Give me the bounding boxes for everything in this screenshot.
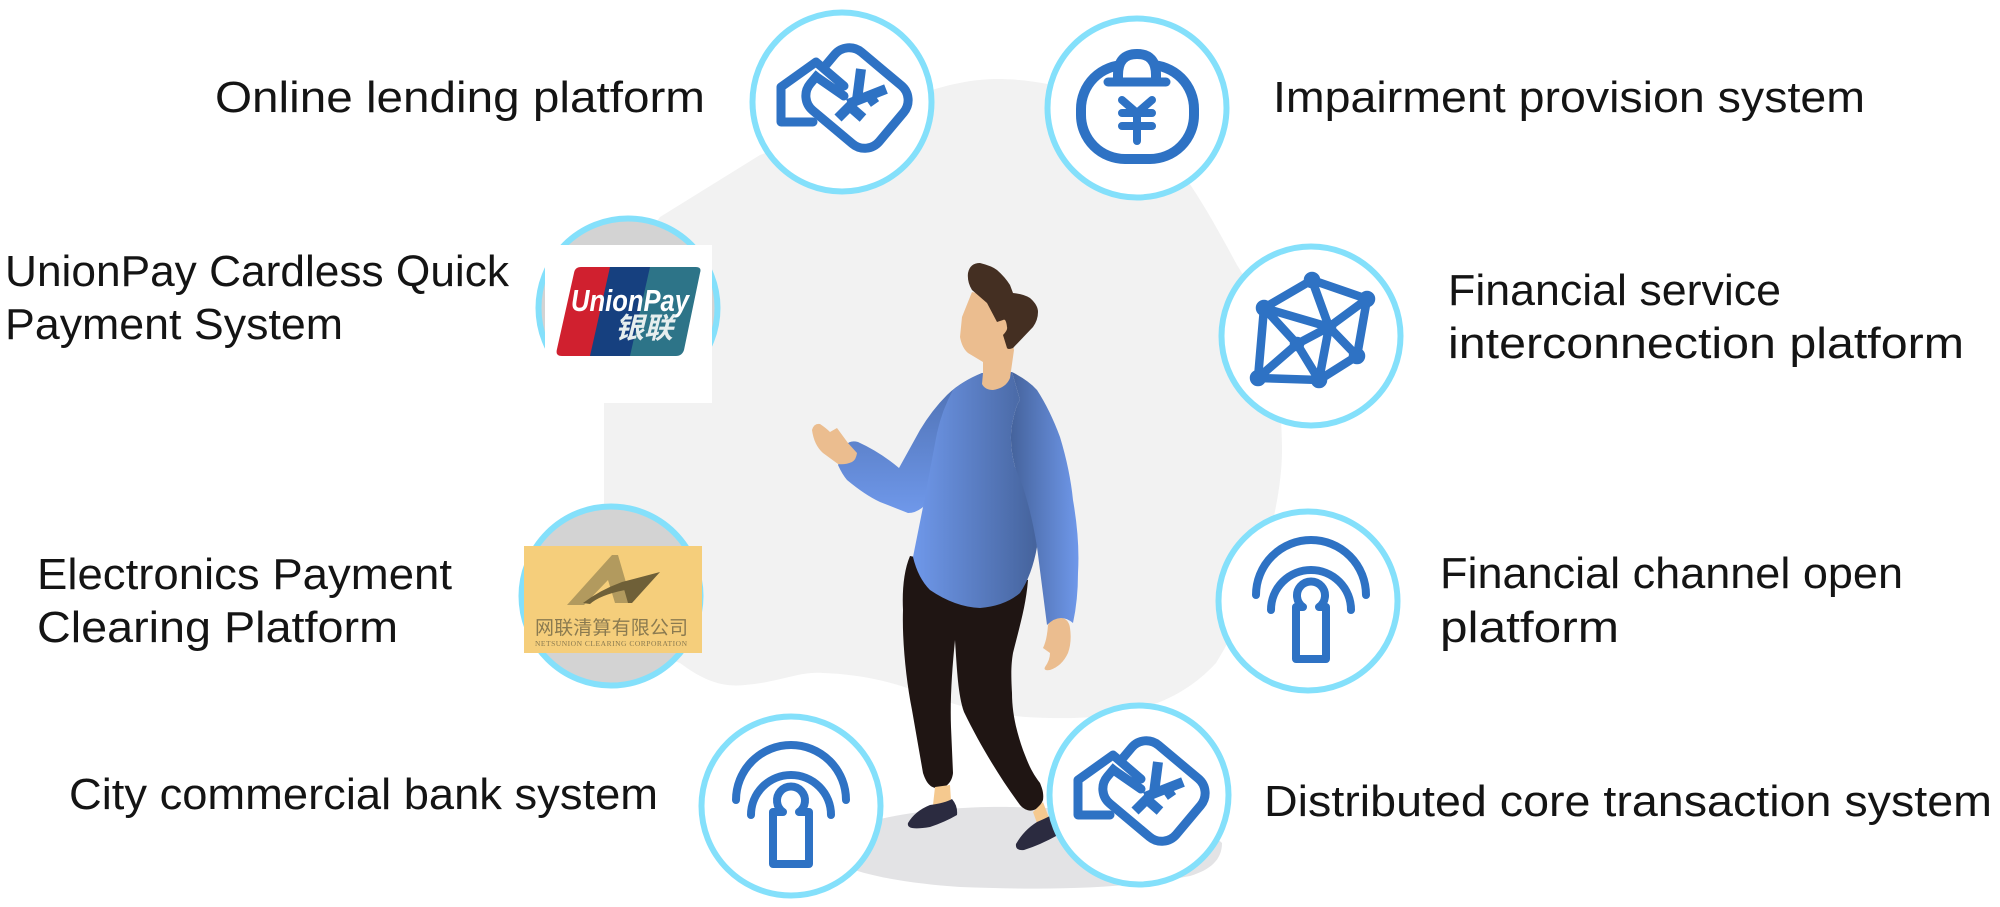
right hand [1043,617,1071,670]
icon circle: financial service network [1222,246,1400,426]
label: financial service interconnection platform: Financial service [1448,266,1781,315]
left hand [812,424,857,464]
icon circle: city commercial bank [702,716,880,896]
NetsUnion logo [524,546,702,653]
label: electronics payment clearing platform: Electronics Payment [37,550,452,599]
Electronics payment circle [522,506,700,686]
shoes [908,799,1058,850]
NetsUnion logo: 网联清算有限公司 [535,613,688,640]
icon: antenna tag [736,745,846,864]
background blob [604,79,1282,718]
label: impairment provision system: Impairment provision system [1273,73,1865,122]
label: financial channel open platform: Financial channel open [1440,549,1903,598]
UnionPay circle [538,218,718,398]
icon: card with yuan [1078,733,1213,849]
label: UnionPay cardless quick payment system [5,247,510,349]
right arm [1011,372,1078,625]
label: UnionPay cardless quick payment system: Payment System [5,300,343,349]
icon: antenna tag [1256,540,1366,659]
label: financial service interconnection platform [1448,266,1964,368]
ground shadow [816,807,1222,889]
icon: yuan money bag [1081,54,1194,159]
label: online lending platform: Online lending platform [215,73,705,122]
legs [903,556,1043,811]
UnionPay logo: UnionPay [571,283,690,318]
NetsUnion logo: NETSUNION CLEARING CORPORATION [535,639,688,648]
label: city commercial bank system: City commercial bank system [69,770,658,819]
UnionPay logo: 银联 [615,305,677,347]
icon circle: impairment provision [1048,18,1226,198]
icon: mesh network [1254,276,1371,384]
icon circle: online lending [752,12,932,192]
icon circle: distributed core [1050,706,1228,884]
left arm [838,373,982,513]
neck and face [960,292,1014,390]
torso [913,372,1037,608]
UnionPay logo [545,245,712,403]
label: electronics payment clearing platform [37,550,452,652]
label: financial channel open platform: platform [1440,603,1619,652]
icon: card with yuan [781,40,916,156]
label: financial channel open platform [1440,549,1903,652]
hair [968,263,1038,349]
label: financial service interconnection platform: interconnection platform [1448,319,1964,368]
label: distributed core transaction system: Distributed core transaction system [1264,777,1992,826]
person illustration [812,263,1078,850]
label: UnionPay cardless quick payment system: UnionPay Cardless Quick [5,247,510,296]
icon circle: financial channel [1218,512,1398,690]
ankles [933,785,1049,823]
label: electronics payment clearing platform: Clearing Platform [37,603,398,652]
